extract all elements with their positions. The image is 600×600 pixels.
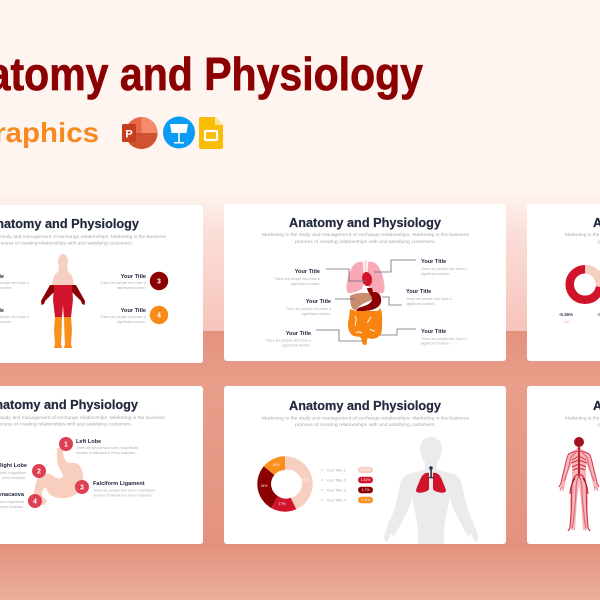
icon: Keynote (163, 116, 195, 148)
organ labels: significant number. (302, 312, 331, 316)
panel: lungs and donut (224, 386, 506, 550)
body silhouette (384, 437, 478, 550)
donut chart: 24% (261, 484, 267, 488)
icon: Google Slides (199, 117, 223, 149)
legend: 1.31% (361, 478, 370, 482)
organ labels: Your Title (306, 299, 331, 305)
body figure (41, 254, 85, 348)
lungs (416, 466, 446, 493)
organ labels: significant number. (406, 302, 435, 306)
callout 4: 4 (157, 312, 161, 320)
donut chart: 14% (273, 463, 279, 467)
organ labels: Your Title (286, 331, 311, 337)
stomach labels: Falciform Ligament (93, 481, 145, 487)
organ labels: There are people who have a (285, 307, 331, 311)
description: process of creating relationships with and satisfying customers. (295, 239, 436, 245)
callout 3: significant number. (117, 286, 146, 290)
legend: Your Title 2 (326, 478, 347, 482)
panel: stomach (0, 386, 203, 544)
legend: Your Title 4 (326, 498, 347, 502)
description: ocess of creating relationships with and satisfying customers. (0, 422, 132, 428)
stomach labels: number of followers in every business. (93, 494, 153, 498)
callout 4 (100, 306, 168, 324)
stomach labels: number of followers in every business. (76, 451, 136, 455)
marker 3: 3 (80, 484, 84, 492)
description (565, 416, 600, 428)
organ labels: There are people who have a (421, 267, 467, 271)
panel: donut stats (527, 204, 600, 361)
organ labels: significant number. (421, 342, 450, 346)
heading: Anatomy and Physiology (289, 398, 442, 413)
stat: -5.36% (559, 312, 573, 317)
callouts left, cropped (0, 274, 29, 324)
stat: Left (563, 320, 569, 324)
marker 4: 4 (33, 498, 37, 506)
marker 2: 2 (37, 468, 41, 476)
callout 4: Your Title (121, 308, 146, 314)
icon: PowerPoint (122, 117, 158, 149)
description: ocess of creating relationships with and satisfying customers. (1, 240, 133, 246)
stomach labels: Left Lobe (76, 439, 101, 445)
organs illustration (346, 260, 384, 345)
legend: 3.71% (361, 498, 370, 502)
marker 3 (75, 480, 89, 494)
organ labels: significant number. (282, 344, 311, 348)
description (565, 232, 600, 245)
description (0, 234, 167, 246)
stomach labels: There are people who have a significant (93, 488, 155, 492)
donut chart (257, 456, 313, 512)
organ labels: There are people who have a (274, 277, 320, 281)
marker 2 (32, 464, 46, 478)
description: process of creating relationships with and satisfying customers. (295, 422, 436, 428)
organ labels: There are people who have a (265, 338, 311, 342)
nervous system figure (559, 437, 599, 531)
marker 1 (59, 437, 73, 451)
stat (559, 312, 600, 324)
organ labels: There are people who have a (406, 297, 452, 301)
stomach illustration (34, 448, 83, 505)
description: study and management of exchange relationships. Marketing is the business (0, 415, 166, 421)
description: Marketing is the study and management of exchange relationships. Marketing is the business (262, 416, 470, 422)
legend (321, 467, 373, 503)
organ labels: Your Title (295, 269, 320, 275)
callout 3: There are people who have a (100, 281, 146, 285)
callout 3: Your Title (121, 274, 146, 280)
legend: Your Title 3 (326, 488, 347, 492)
organ labels: significant number. (291, 282, 320, 286)
icon: PowerPoint: P (125, 128, 133, 140)
donut chart: 41% (302, 478, 308, 482)
legend: 1.7% (362, 488, 369, 492)
legend: Your Title 1 (326, 468, 347, 472)
stomach labels (0, 439, 155, 509)
leader lines (316, 260, 416, 341)
marker 4 (28, 494, 42, 508)
donut chart: 17% (279, 502, 285, 506)
organ labels (265, 259, 467, 348)
organ labels: There are people who have a (421, 337, 467, 341)
organ labels: Your Title (406, 289, 431, 295)
description (262, 232, 470, 245)
callout 4: There are people who have a (100, 315, 146, 319)
stomach labels: every business. (0, 505, 24, 509)
description: Marketing is the study and management of exchange relationships. Marketing is the business (262, 232, 470, 238)
callout 3 (100, 272, 168, 290)
heading: Anatomy and Physiology (289, 215, 442, 230)
panel: organs (224, 204, 506, 361)
legend: 1.31% (361, 468, 370, 472)
organ labels: significant number. (421, 272, 450, 276)
panel: nervous system (527, 386, 600, 544)
stomach labels: every business. (2, 476, 26, 480)
callout 3: 3 (157, 278, 161, 286)
organ labels: Your Title (421, 259, 446, 265)
description (262, 416, 470, 428)
panel: body regions (0, 205, 203, 363)
ring chart (570, 269, 600, 300)
organ labels: Your Title (421, 329, 446, 335)
description (0, 415, 166, 428)
marker 1: 1 (64, 442, 68, 448)
description: study and management of exchange relationships. Marketing is the business (0, 234, 167, 240)
callout 4: significant number. (117, 320, 146, 324)
stomach labels: There are people who have a significant (76, 446, 138, 450)
